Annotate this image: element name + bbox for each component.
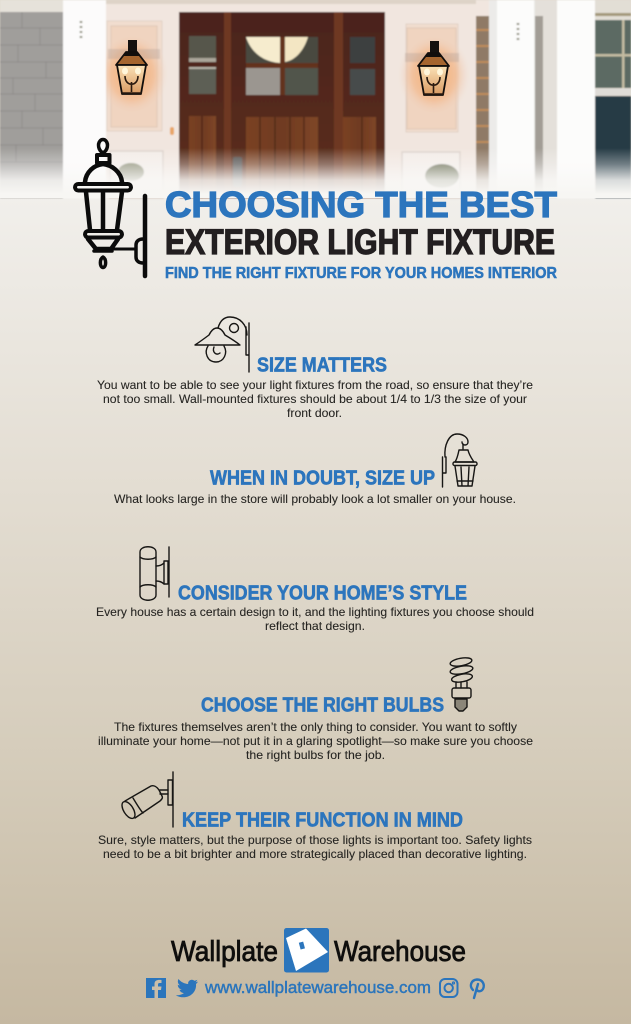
website url: www.wallplatewarehouse.com: [204, 978, 431, 997]
icon: instagram: [440, 979, 458, 997]
icon: spiral bulb: [450, 656, 473, 711]
section: size matters: [97, 317, 533, 420]
right siding, columns and window: [476, 16, 489, 198]
body text: [98, 720, 533, 762]
body text: illuminate your home—not put it in a glaring spotlight—so make sure you choose: [98, 734, 533, 748]
logo mark: [284, 928, 329, 972]
body text: the right bulbs for the job.: [246, 748, 385, 762]
logo word: Warehouse: Warehouse: [334, 936, 466, 968]
logo: [171, 928, 466, 972]
heading: CHOOSE THE RIGHT BULBS: [201, 694, 444, 716]
body text: [97, 378, 533, 420]
photo fade to background: [0, 148, 631, 194]
icon: cylinder sconce: [140, 547, 169, 600]
lantern: left: [116, 40, 147, 94]
plants: [118, 163, 144, 181]
photo: front door with lanterns: [0, 0, 631, 198]
icon: spot light: [119, 772, 173, 827]
body text: front door.: [287, 406, 342, 420]
title line 1: CHOOSING THE BEST: [165, 184, 557, 225]
lantern: right: [418, 41, 449, 95]
icon: facebook: [146, 978, 166, 998]
social and website row: [146, 978, 484, 998]
body text: not too small. Wall-mounted fixtures should be about 1/4 to 1/3 the size of your: [103, 392, 527, 406]
icon: pinterest: [471, 980, 484, 998]
icon: twitter: [176, 979, 198, 997]
icon: hanging shade lamp: [195, 317, 249, 372]
body text: need to be a bit brighter and more strategically placed than decorative lighting.: [103, 847, 527, 861]
section: home style: [96, 547, 534, 633]
body text: reflect that design.: [265, 619, 365, 633]
icon: header wall lantern: [75, 140, 145, 276]
heading: CONSIDER YOUR HOME’S STYLE: [178, 582, 467, 604]
body text: [96, 605, 534, 633]
heading: WHEN IN DOUBT, SIZE UP: [210, 468, 435, 490]
body text: The fixtures themselves aren’t the only thing to consider. You want to softly: [114, 720, 517, 734]
body text: Every house has a certain design to it, and the lighting fixtures you choose should: [96, 605, 534, 619]
body text: [98, 833, 532, 861]
logo word: Wallplate: Wallplate: [171, 936, 278, 968]
body text: What looks large in the store will probably look a lot smaller on your house.: [114, 492, 516, 506]
body text: You want to be able to see your light fixtures from the road, so ensure that they’re: [97, 378, 533, 392]
section: right bulbs: [98, 656, 533, 762]
wall panels: [107, 21, 162, 131]
title line 2: EXTERIOR LIGHT FIXTURE: [165, 223, 555, 262]
heading: SIZE MATTERS: [257, 354, 387, 376]
subtitle: FIND THE RIGHT FIXTURE FOR YOUR HOMES INTERIOR: [165, 265, 557, 282]
title: [165, 184, 557, 282]
heading: KEEP THEIR FUNCTION IN MIND: [182, 810, 463, 832]
door: [179, 12, 385, 198]
section: function: [98, 772, 532, 861]
body text: Sure, style matters, but the purpose of those lights is important too. Safety lights: [98, 833, 532, 847]
section: when in doubt: [114, 434, 516, 506]
icon: hanging lantern: [442, 434, 477, 487]
